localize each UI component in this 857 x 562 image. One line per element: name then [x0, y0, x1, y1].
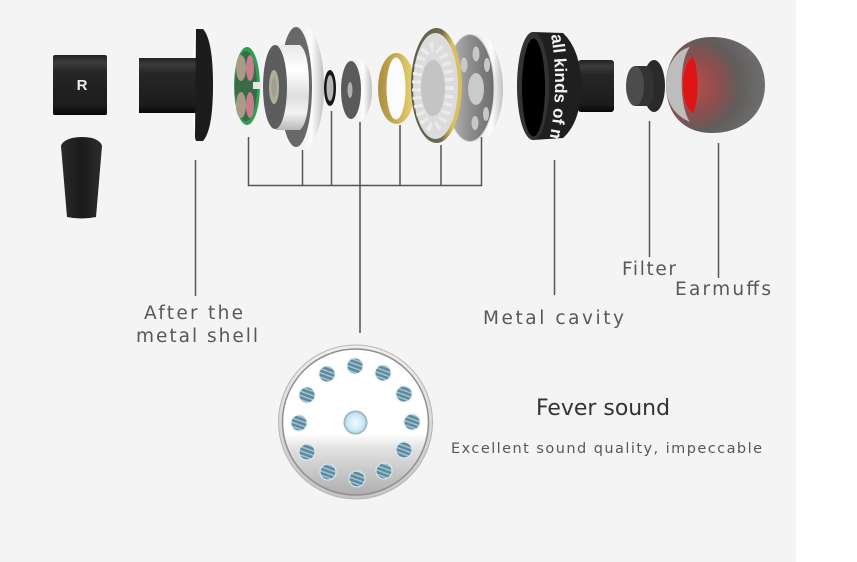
icon: gold ring — [378, 53, 415, 124]
heading: Fever sound: Fever sound — [536, 396, 670, 421]
icon: filter — [626, 60, 665, 112]
icon: silver driver housing — [263, 27, 324, 147]
icon: diaphragm — [411, 28, 462, 143]
label: After the metal shell — [136, 303, 258, 347]
icon: small black ring — [324, 70, 336, 106]
label: After the metal shell: After the — [144, 303, 243, 324]
icon: R channel housing: R — [77, 77, 88, 94]
text: Excellent sound quality, impeccable: Excellent sound quality, impeccable — [451, 441, 762, 457]
label: After the metal shell: metal shell — [136, 326, 258, 347]
icon: silicone earmuff — [666, 37, 765, 133]
icon: back silver disc — [446, 34, 503, 142]
label: Metal cavity: Metal cavity — [483, 308, 624, 329]
icon: metal cavity — [517, 32, 614, 140]
icon: green circuit board — [234, 47, 261, 125]
label: Earmuffs: Earmuffs — [675, 279, 771, 300]
icon: front view of driver back with vents — [278, 345, 432, 499]
icon: R channel housing — [53, 55, 107, 115]
engraved text: all kinds of m — [550, 34, 568, 138]
icon: cable strain relief plug — [61, 137, 102, 218]
icon: rear metal shell — [139, 29, 213, 141]
icon: small silver magnet — [341, 60, 372, 119]
leader lines — [196, 111, 718, 333]
label: Filter: Filter — [622, 259, 676, 280]
